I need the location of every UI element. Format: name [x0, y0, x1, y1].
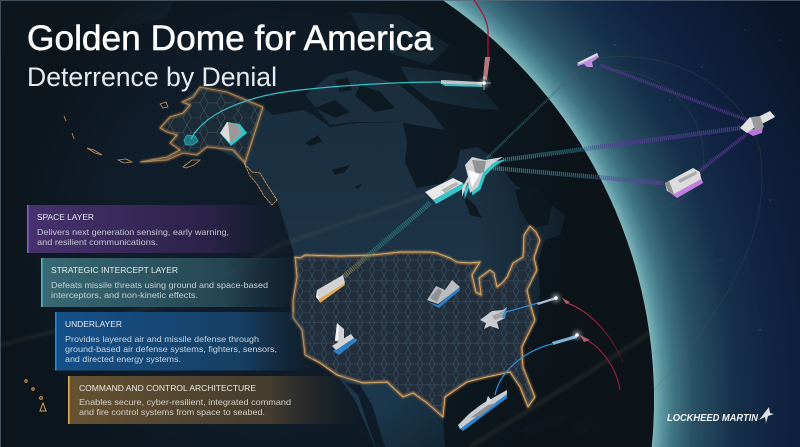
landmass: arctic islands and greenland [305, 12, 500, 130]
heading: command and control: COMMAND AND CONTROL ARCHITECTURE [79, 383, 256, 393]
logo: lockheed martin [667, 407, 774, 424]
space satellite: small top [577, 53, 599, 67]
text: strategic intercept description: Defeats missile threats using ground and space-based [51, 280, 268, 290]
radome ground station [220, 122, 247, 146]
text: underlayer description: and directed energy systems. [65, 354, 181, 364]
dark channels and lakes [305, 30, 552, 227]
aleutian and coast islands [64, 102, 200, 168]
panel: space layer [27, 205, 289, 253]
text: command and control description: Enables secure, cyber-resilient, integrated command [79, 397, 291, 407]
text: underlayer description: ground-based air defense systems, fighters, sensors, [65, 344, 277, 354]
landmass: siberia [0, 0, 175, 52]
alaska panhandle [244, 163, 277, 205]
landmass: north america [167, 87, 565, 447]
radar array west [316, 275, 345, 303]
interceptor and flash upper right [537, 294, 623, 363]
light streaks [0, 195, 700, 447]
interceptor and flash lower right [495, 331, 620, 395]
launcher central [427, 280, 460, 308]
space satellite: main with solar wing [425, 157, 506, 204]
panel: strategic intercept layer [41, 258, 303, 307]
red threat missile top [474, 0, 490, 80]
text: underlayer description: Provides layered air and missile defense through [65, 334, 259, 344]
text: underlayer description [65, 334, 277, 364]
faint orbit rings [590, 57, 762, 400]
text: space layer description [37, 227, 229, 247]
map: contiguous US with hex grid [293, 226, 540, 417]
subtitle: Deterrence by Denial [27, 62, 277, 92]
alaska [140, 87, 277, 205]
text: strategic intercept description [51, 280, 268, 300]
gulf of california [345, 383, 385, 447]
panel: command and control architecture [68, 376, 358, 424]
title: Golden Dome for America [27, 19, 434, 58]
caribbean islands [520, 416, 595, 446]
heading: space layer: SPACE LAYER [37, 212, 94, 222]
text: space layer description: and resilient communications. [37, 237, 158, 247]
logo: lockheed martin: LOCKHEED MARTIN [667, 412, 758, 424]
text: strategic intercept description: interceptors, and non-kinetic effects. [51, 290, 198, 300]
fighter jet with blue trail [480, 299, 552, 329]
space satellite: large right [740, 111, 775, 136]
text: command and control description: and fire control systems from space to seabed. [79, 407, 265, 417]
space satellite: cluster [665, 168, 703, 198]
interceptor vehicle top [441, 80, 482, 87]
navy ship [458, 390, 507, 431]
flash top [477, 76, 491, 90]
launcher southwest [332, 323, 358, 355]
interceptor arc from alaska [184, 82, 442, 145]
panel: underlayer [55, 312, 317, 370]
satellite beams [343, 65, 747, 277]
heading: strategic intercept layer: STRATEGIC INTERCEPT LAYER [51, 265, 178, 275]
heading: underlayer: UNDERLAYER [65, 319, 122, 329]
text: space layer description: Delivers next generation sensing, early warning, [37, 227, 229, 237]
stars [614, 30, 780, 430]
text: command and control description [79, 397, 291, 417]
hawaii islands [25, 380, 46, 411]
